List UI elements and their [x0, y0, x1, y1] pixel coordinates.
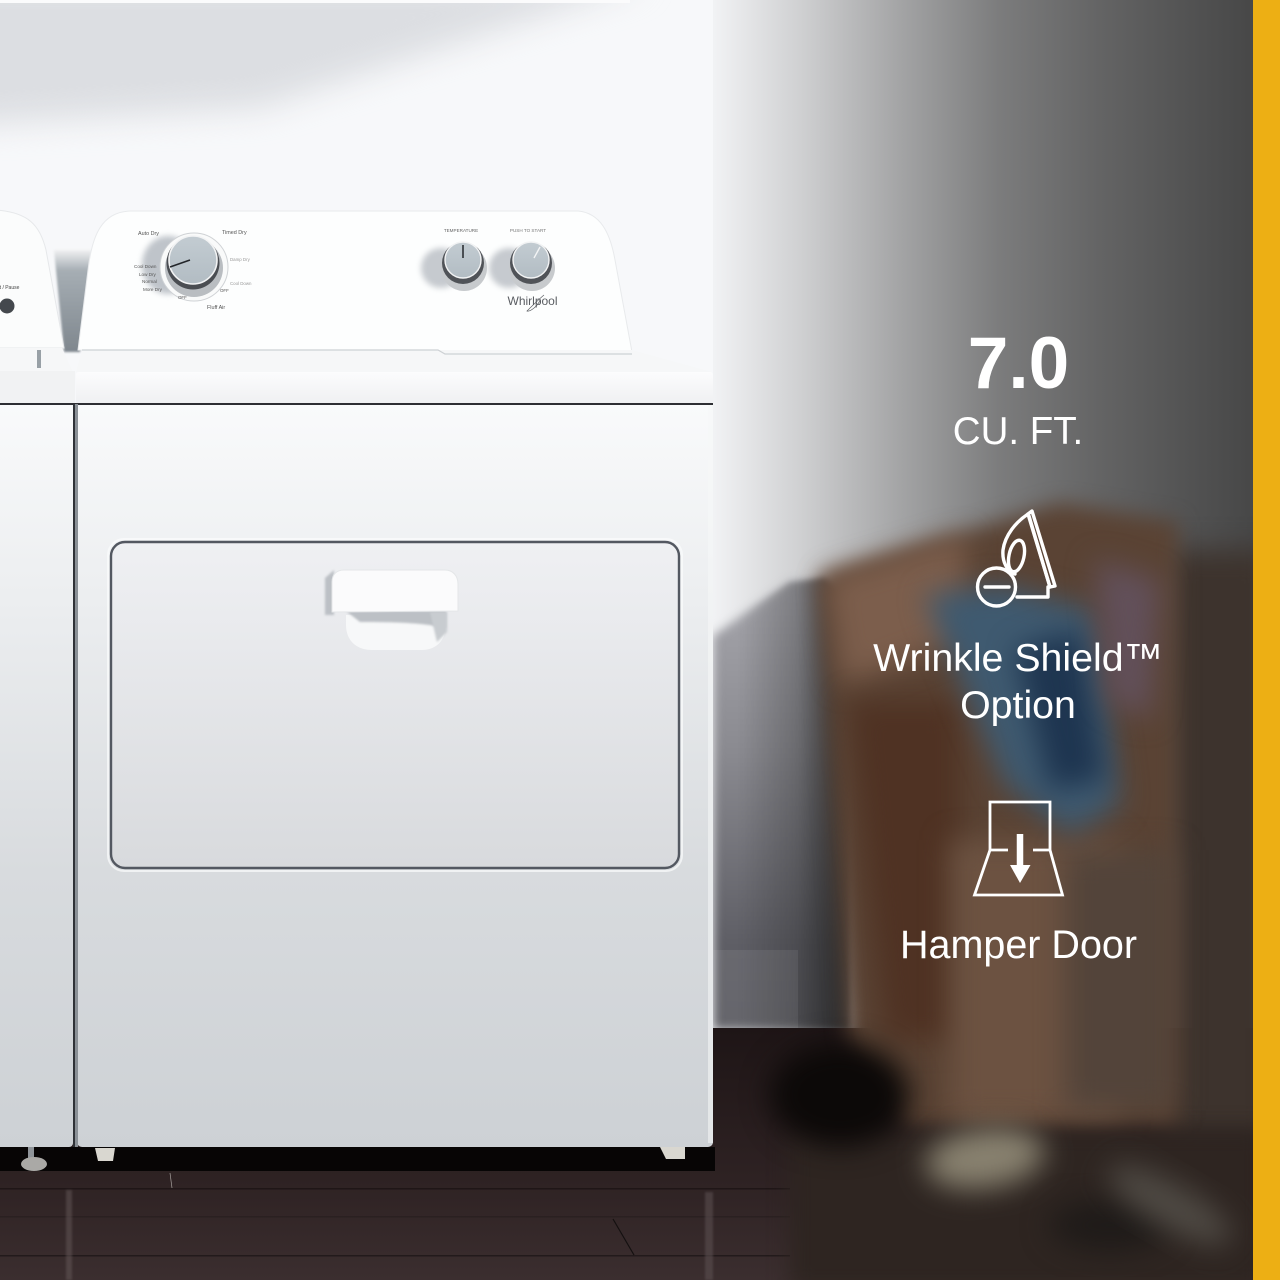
cycle labels: Damp Dry [230, 257, 251, 262]
icon: iron with minus [978, 511, 1055, 606]
cabinet right edge highlight [708, 405, 713, 1143]
dryer console [78, 211, 632, 352]
capacity value [953, 323, 1083, 453]
wrinkle shield label: Wrinkle Shield™ [873, 636, 1163, 680]
floor under hamper [790, 1130, 1265, 1280]
blurred hamper backdrop [770, 503, 1275, 1280]
whirlpool logo: Whirlpool [508, 294, 558, 308]
cycle labels: Timed Dry [222, 230, 247, 236]
cycle labels [134, 230, 252, 311]
baseboard [713, 950, 798, 1028]
shadow on wall beside hamper [713, 578, 850, 1030]
hamper upper left highlight [826, 535, 965, 685]
dryer feet [95, 1147, 685, 1161]
capacity value: 7.0 [968, 323, 1069, 404]
second floor shadow [1058, 1201, 1154, 1250]
cycle labels: Cool Down [134, 264, 157, 269]
cycle labels: OFF [220, 288, 229, 293]
blurred shoe left [921, 1120, 1049, 1196]
hamper door label: Hamper Door [900, 923, 1137, 967]
cycle labels: Cool Down [230, 281, 252, 286]
cycle labels: Low Dry [139, 272, 157, 277]
floor shadow [770, 1043, 910, 1147]
lid seam [82, 350, 632, 354]
shadow between washer and dryer [54, 250, 92, 352]
start knob [489, 228, 555, 291]
yellow side bar [1253, 0, 1280, 1280]
hamper basket [818, 503, 1178, 1128]
icon: hamper door [974, 802, 1062, 895]
blurred shoe right [1104, 1158, 1236, 1252]
hamper lower left dark side [848, 700, 960, 1040]
gap between appliances [73, 404, 75, 1147]
door handle [325, 570, 458, 650]
cycle dial [142, 233, 228, 301]
cabinet side bevel [75, 404, 78, 1147]
cycle labels: More Dry [143, 287, 163, 292]
wrinkle shield label: Option [960, 683, 1076, 727]
clothes inside hamper [925, 585, 1120, 835]
cycle labels: Auto Dry [138, 231, 159, 237]
wood floor [0, 1028, 1280, 1280]
start knob: PUSH TO START [510, 228, 546, 233]
cycle labels: OFF [178, 295, 187, 300]
cycle labels: Normal [142, 279, 157, 284]
dryer lid top [76, 350, 712, 372]
hamper lower right [1058, 847, 1144, 1113]
temperature knob [421, 228, 487, 291]
temperature knob: TEMPERATURE [444, 228, 478, 233]
dryer cabinet [77, 405, 713, 1147]
lid shadow line [0, 403, 713, 405]
hamper lower centre [950, 840, 1120, 1120]
cycle labels: Fluff Air [207, 305, 225, 311]
pink clothes [1095, 560, 1160, 720]
dark blue clothes [1015, 630, 1105, 790]
door [108, 539, 682, 871]
right side panel [1172, 540, 1253, 1130]
washer at left edge [0, 210, 75, 1171]
capacity value: CU. FT. [953, 410, 1083, 453]
wrinkle shield label [873, 636, 1163, 727]
dryer [0, 211, 713, 1161]
dryer lid front [76, 372, 713, 404]
